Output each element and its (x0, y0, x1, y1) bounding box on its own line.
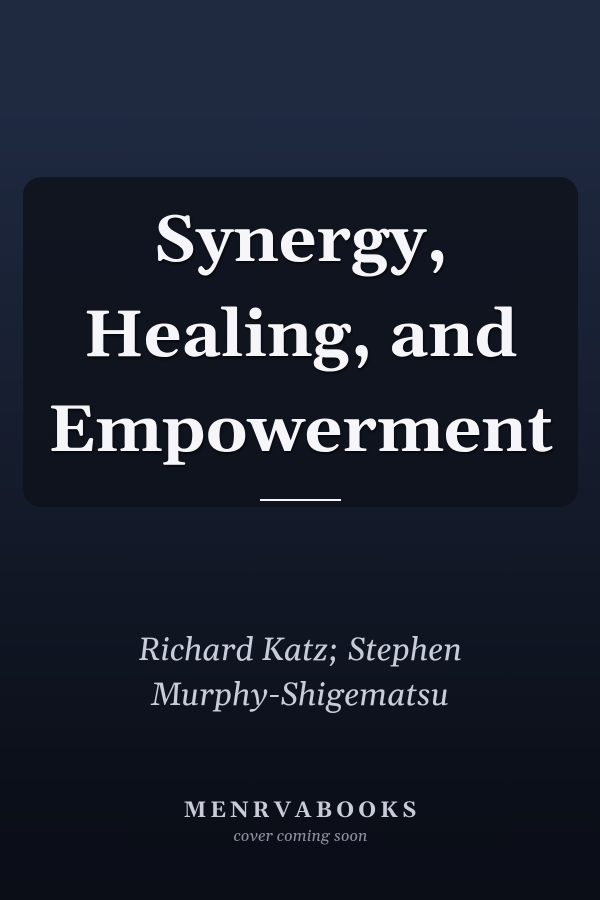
cover note: cover coming soon (234, 827, 367, 847)
title: Empowerment (48, 390, 553, 474)
panel: title backdrop (23, 177, 578, 507)
author: Richard Katz; Stephen (138, 630, 462, 671)
title: Healing, and (84, 295, 518, 379)
title: Synergy, (153, 200, 448, 284)
publisher: MENRVABOOKS (184, 797, 420, 825)
title (48, 200, 553, 474)
author (138, 630, 462, 716)
author: Murphy-Shigematsu (151, 675, 449, 716)
accent rule (260, 499, 341, 501)
